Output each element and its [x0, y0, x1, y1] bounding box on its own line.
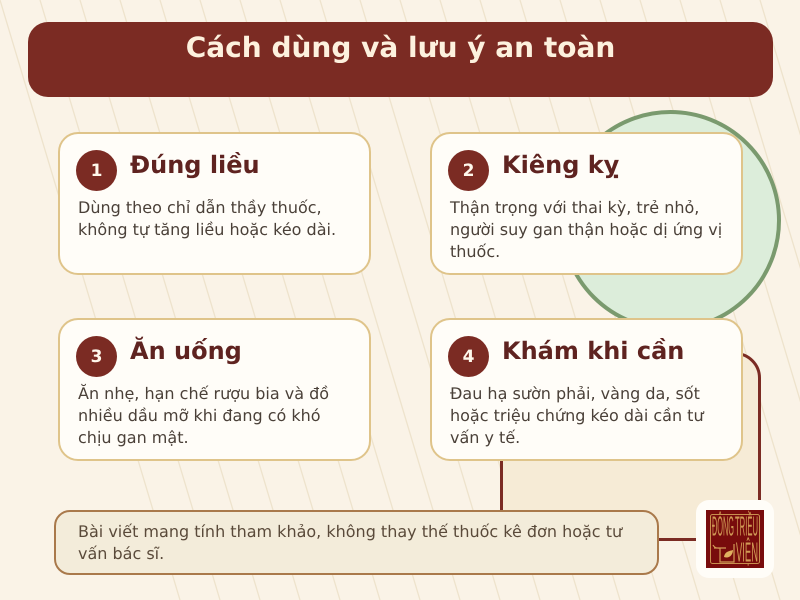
- number badge 1: [76, 150, 117, 191]
- title banner: [28, 22, 773, 97]
- decorative green circle: [560, 110, 781, 331]
- number badge 3: 3: [91, 347, 102, 367]
- number badge 1: 1: [91, 161, 102, 181]
- panel: card 3 diet: [58, 318, 371, 461]
- text: cautions: người suy gan thận hoặc dị ứng vị: [450, 220, 722, 239]
- disclaimer note: Bài viết mang tính tham khảo, không thay thế thuốc kê đơn hoặc tư: [78, 522, 622, 541]
- number badge 4: 4: [463, 347, 474, 367]
- text: diet advice: Ăn nhẹ, hạn chế rượu bia và đồ: [78, 384, 329, 403]
- text: cautions: Thận trọng với thai kỳ, trẻ nhỏ,: [450, 198, 699, 217]
- text: cautions: thuốc.: [450, 242, 500, 261]
- disclaimer note: vấn bác sĩ.: [78, 544, 164, 563]
- panel: card 1 dosage: [58, 132, 371, 275]
- text: dosage advice: [78, 198, 336, 239]
- text: when to see a doctor: Đau hạ sườn phải, vàng da, sốt: [450, 384, 700, 403]
- text: diet advice: [78, 384, 329, 447]
- logo: Đông Triều Y Viện seal: VIỆN: [736, 536, 758, 568]
- logo: Đông Triều Y Viện seal: [696, 500, 774, 578]
- number badge 3: [76, 336, 117, 377]
- text: diet advice: chịu gan mật.: [78, 428, 189, 447]
- number badge 4: [448, 336, 489, 377]
- number badge 2: [448, 150, 489, 191]
- number badge 2: 2: [463, 161, 474, 181]
- text: when to see a doctor: hoặc triệu chứng kéo dài cần tư: [450, 406, 704, 425]
- text: dosage advice: Dùng theo chỉ dẫn thầy thuốc,: [78, 198, 322, 217]
- text: cautions: [450, 198, 722, 261]
- text: diet advice: nhiều dầu mỡ khi đang có khó: [78, 406, 321, 425]
- logo: Đông Triều Y Viện seal: ĐÔNG: [712, 510, 734, 542]
- title banner: Cách dùng và lưu ý an toàn: [186, 31, 615, 64]
- text: when to see a doctor: vấn y tế.: [450, 428, 520, 447]
- text: dosage advice: không tự tăng liều hoặc kéo dài.: [78, 220, 336, 239]
- text: when to see a doctor: [450, 384, 704, 447]
- panel: card 4 see a doctor: [430, 318, 743, 461]
- disclaimer note: [54, 510, 659, 575]
- heading: Đúng liều: Đúng liều: [130, 151, 260, 179]
- heading: Khám khi cần: Khám khi cần: [502, 337, 684, 365]
- connector panel: tan box behind card 4: [500, 352, 761, 541]
- heading: Ăn uống: Ăn uống: [130, 337, 242, 365]
- panel: card 2 cautions: [430, 132, 743, 275]
- heading: Kiêng kỵ: Kiêng kỵ: [502, 151, 619, 179]
